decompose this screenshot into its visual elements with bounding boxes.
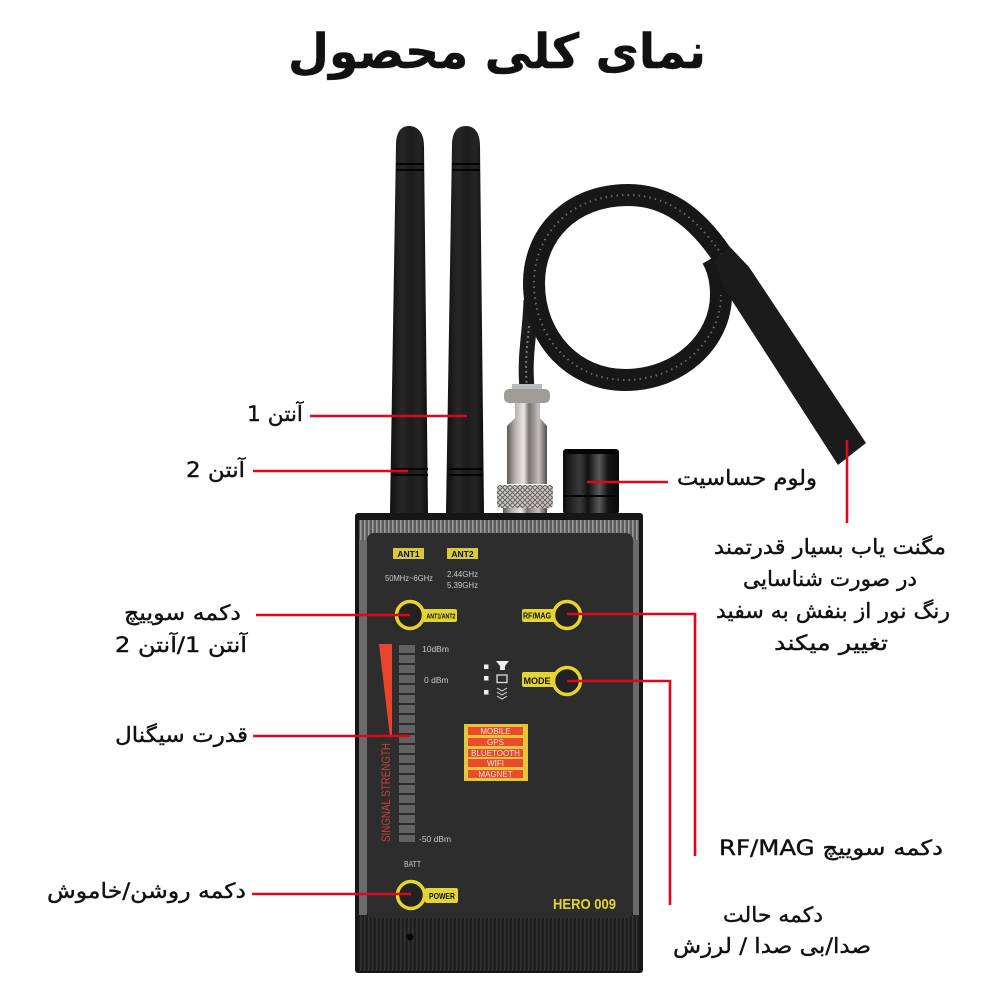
function table: MAGNET [478,770,513,779]
ANT1 label: ANT1 [397,549,420,559]
ANT switch button: ANT1/ANT2 [426,612,456,620]
RF/MAG button [522,602,580,628]
text block: magnet detector: تغییر میکند [774,631,888,655]
text block: magnet detector: رنگ نور از بنفش به سفید [716,599,950,623]
label: RF/MAG switch: دکمه سوییچ RF/MAG [719,836,943,860]
dBm scale [419,644,451,844]
magnet sensor gooseneck [526,195,722,388]
function table: BLUETOOTH [471,749,520,758]
label: signal strength: قدرت سیگنال [115,723,248,747]
ANT1 label [393,548,424,559]
text block: antenna switch: دکمه سوییچ [124,601,241,625]
frequency labels [385,569,478,590]
function table [464,724,528,781]
text block: magnet detector: در صورت شناسایی [743,567,917,591]
frequency labels: 2.44GHz [447,569,478,579]
antenna 2 [446,126,484,513]
dBm scale: 10dBm [422,644,449,654]
side strips [359,540,639,925]
dBm scale: 0 dBm [424,675,449,685]
frequency labels: 5.39GHz [447,580,478,590]
metal casing [355,513,643,973]
function table: GPS [487,738,504,747]
front panel [367,533,633,918]
text block: antenna switch: آنتن 1/آنتن 2 [115,632,248,657]
function table: MOBILE [480,727,511,736]
label: antenna 2: آنتن 2 [186,457,246,482]
top brushed strip [359,520,639,544]
device body [355,513,643,973]
frequency labels: 50MHz~6GHz [385,573,433,583]
RF/MAG button: RF/MAG [523,612,551,620]
product: antennas and sensor [390,126,866,514]
screw hole [406,934,414,940]
ANT switch button [396,602,457,628]
function table: WIFI [487,759,504,768]
dBm scale: -50 dBm [419,834,451,844]
mode indicators [484,661,509,699]
callout lines [252,416,847,905]
antenna 1 [390,126,428,513]
signal LED bar [399,645,415,842]
POWER button: POWER [429,891,455,901]
text block: mode button [673,903,871,958]
text block: antenna switch [115,601,248,657]
signal wedge [379,644,392,737]
text block: mode button: صدا/بی صدا / لرزش [673,934,871,958]
MODE button [522,668,580,694]
POWER button [398,882,458,908]
BATT label: BATT [404,859,421,869]
MODE button: MODE [524,676,550,686]
connector [497,384,553,514]
label: sensitivity volume: ولوم حساسیت [677,466,817,490]
magnet sensor handle [714,247,866,465]
label: antenna 1: آنتن 1 [247,401,304,426]
label: power button: دکمه روشن/خاموش [47,879,246,903]
title: نمای کلی محصول [288,24,706,80]
text block: mode button: دکمه حالت [723,903,823,927]
model name: HERO 009 [553,896,616,913]
text block: magnet detector: مگنت یاب بسیار قدرتمند [714,535,946,559]
ANT2 label [447,548,478,559]
bottom brushed strip [359,915,639,971]
sensitivity knob [563,449,619,514]
signal strength label: SINGNAL STRENGTH [379,743,393,842]
text block: magnet detector [714,535,950,655]
ANT2 label: ANT2 [451,549,474,559]
